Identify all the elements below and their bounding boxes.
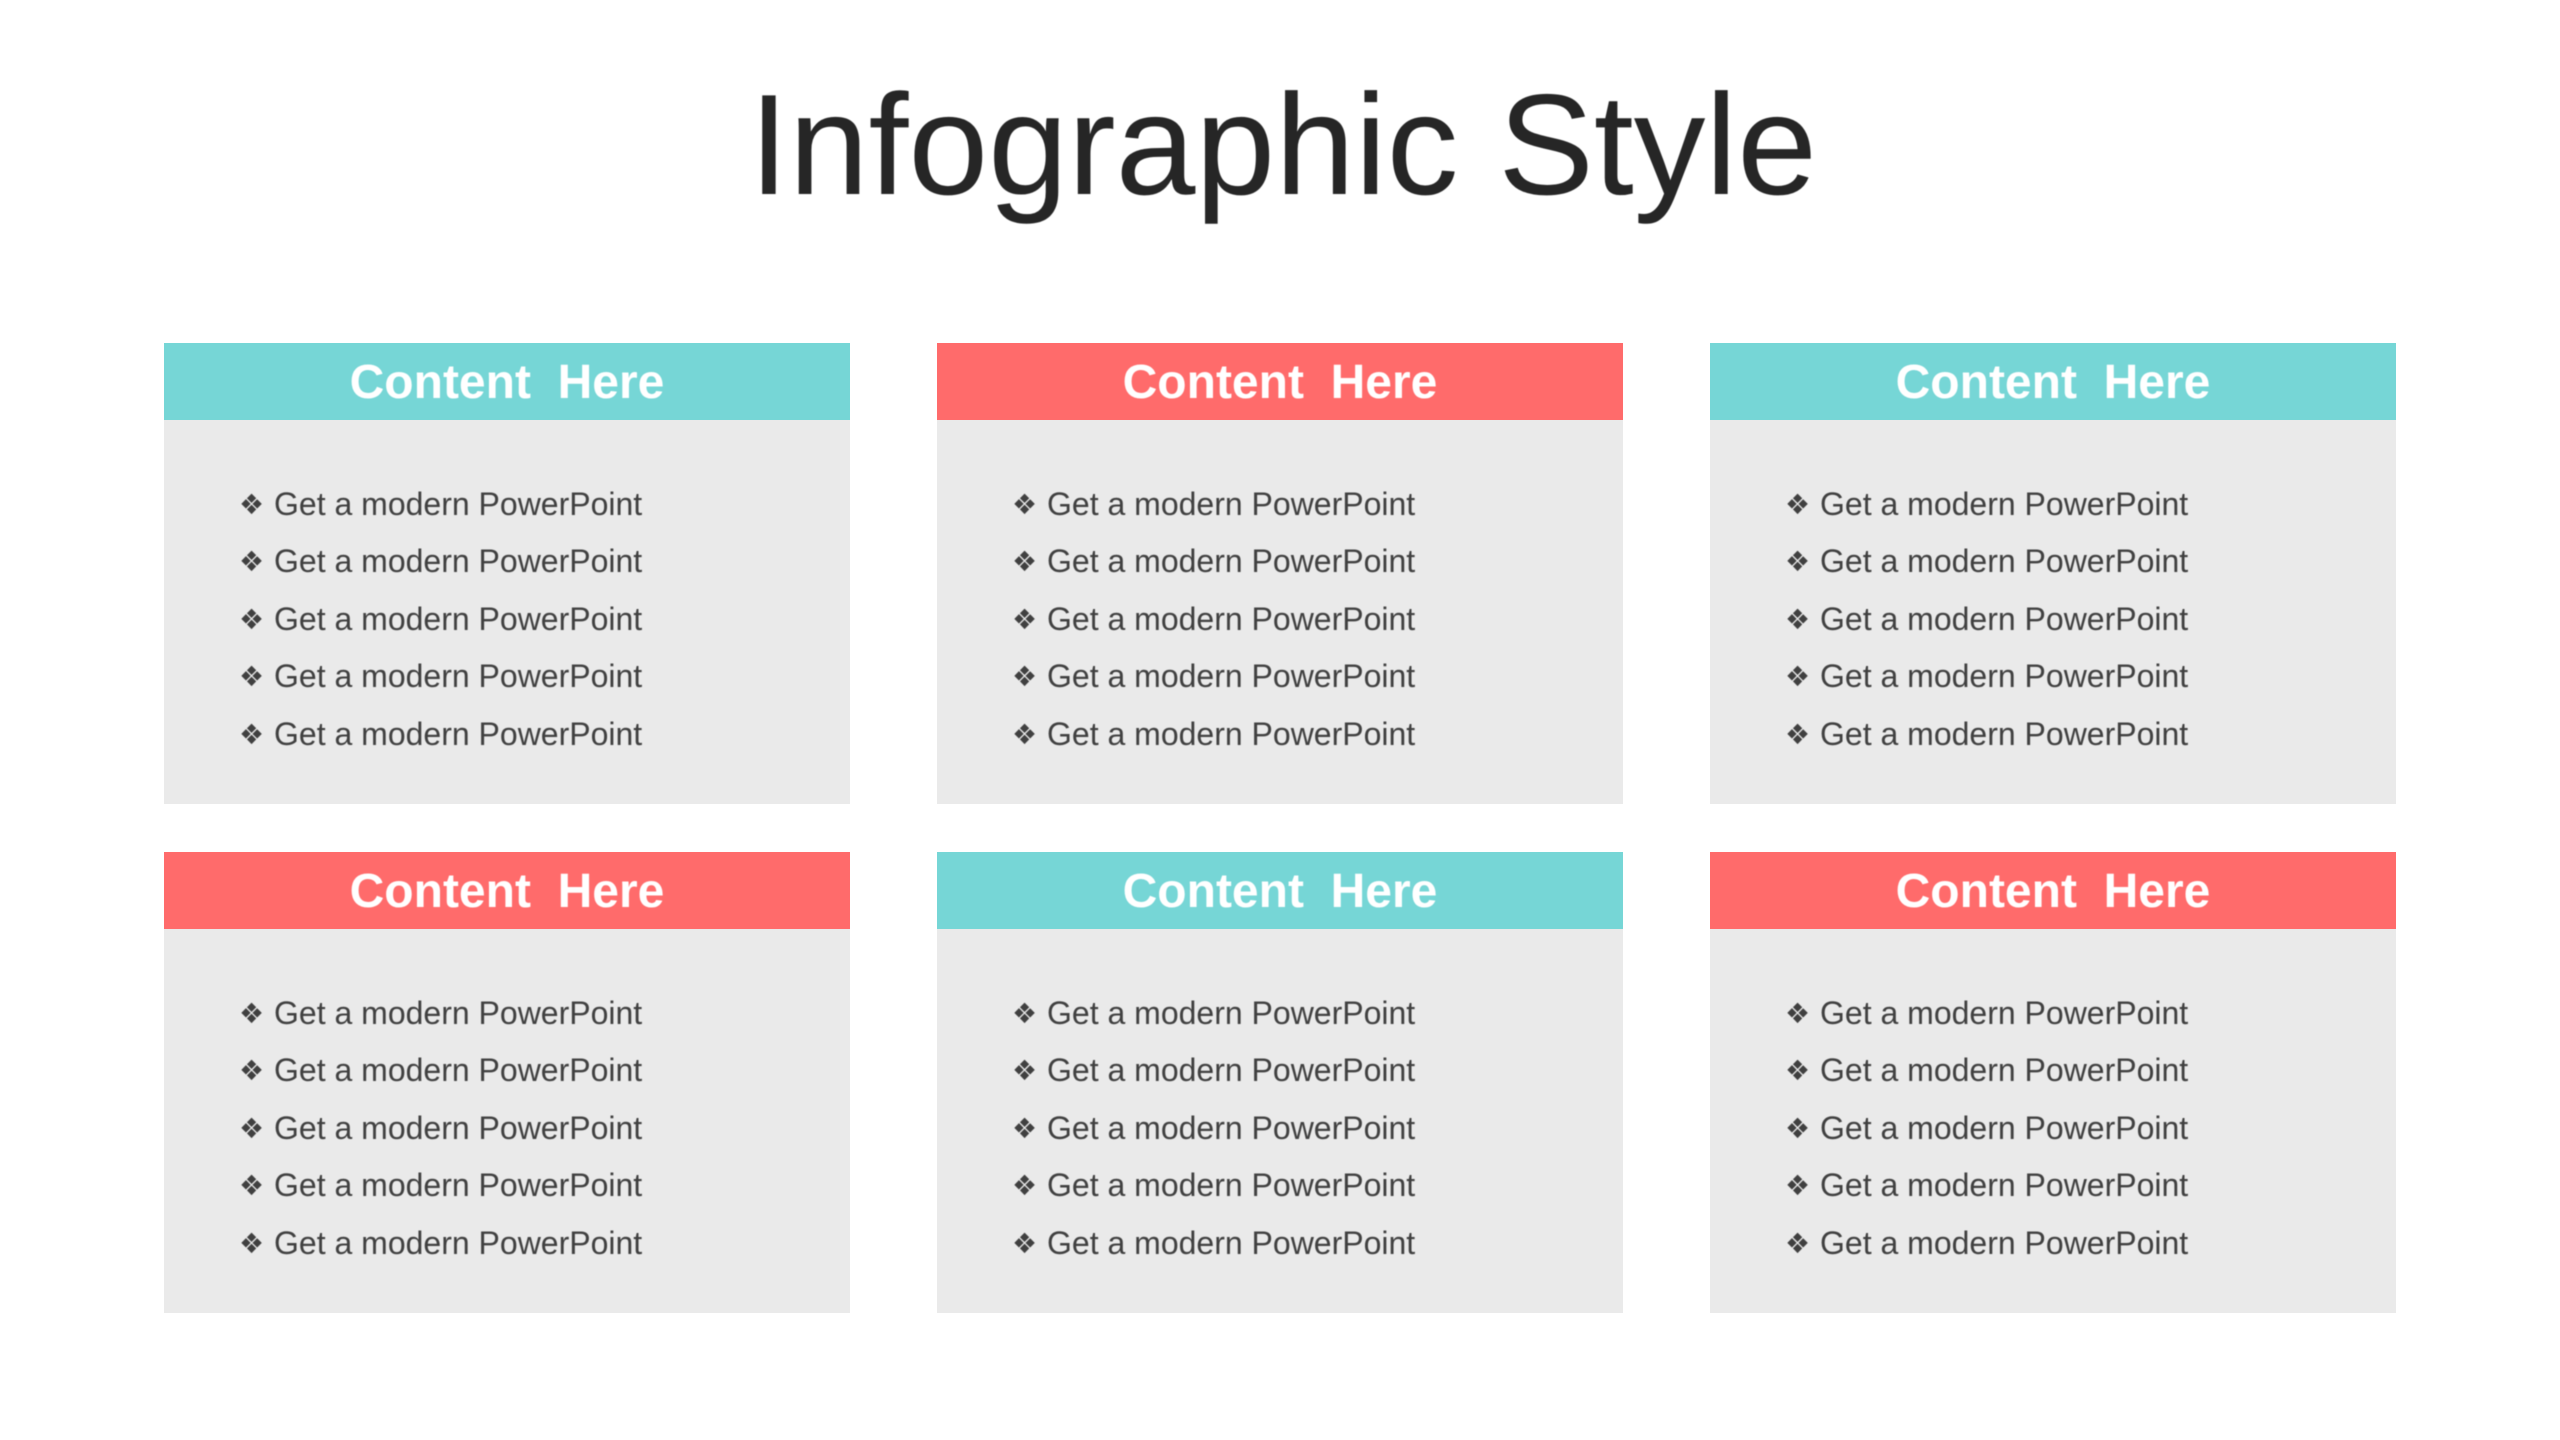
panel: bottom right (1710, 852, 2396, 1313)
list: bottom right: Get a modern PowerPoint (1820, 1225, 2188, 1261)
list: bottom right: ❖ (1785, 1169, 1810, 1202)
list: top middle: Get a modern PowerPoint (1047, 716, 1415, 752)
list: top left: Get a modern PowerPoint (274, 486, 642, 522)
panel: top middle (937, 343, 1623, 804)
list: top middle: Get a modern PowerPoint (1047, 601, 1415, 637)
list: top middle: ❖ (1012, 603, 1037, 636)
heading: bottom left (164, 852, 850, 929)
heading: top right: Content Here (1896, 356, 2210, 409)
list: bottom middle: Get a modern PowerPoint (1047, 1110, 1415, 1146)
list: bottom left: Get a modern PowerPoint (274, 1110, 642, 1146)
list: bottom left: ❖ (239, 1227, 264, 1260)
list: top left: ❖ (239, 718, 264, 751)
list: bottom right: ❖ (1785, 997, 1810, 1030)
list: top left: ❖ (239, 660, 264, 693)
list: bottom right: Get a modern PowerPoint (1820, 1052, 2188, 1088)
list: top left: ❖ (239, 545, 264, 578)
list: bottom right: Get a modern PowerPoint (1820, 1110, 2188, 1146)
list: bottom left: Get a modern PowerPoint (274, 1225, 642, 1261)
title: Infographic Style (749, 65, 1817, 225)
list: top left: Get a modern PowerPoint (274, 543, 642, 579)
list: top right: ❖ (1785, 488, 1810, 521)
list: bottom right: Get a modern PowerPoint (1820, 995, 2188, 1031)
heading: top left: Content Here (350, 356, 664, 409)
list: bottom middle: Get a modern PowerPoint (1047, 995, 1415, 1031)
list: bottom left: Get a modern PowerPoint (274, 1052, 642, 1088)
list: top middle: ❖ (1012, 545, 1037, 578)
list: top left: ❖ (239, 603, 264, 636)
list: bottom middle: ❖ (1012, 1112, 1037, 1145)
list: bottom left (239, 995, 643, 1261)
panel: top right (1710, 343, 2396, 804)
list: bottom left: Get a modern PowerPoint (274, 995, 642, 1031)
list: top left: Get a modern PowerPoint (274, 716, 642, 752)
heading: top right (1710, 343, 2396, 420)
list: bottom middle (1012, 995, 1416, 1261)
heading: top middle (937, 343, 1623, 420)
panel: top left (164, 343, 850, 804)
list: top middle: Get a modern PowerPoint (1047, 486, 1415, 522)
list: bottom middle: ❖ (1012, 997, 1037, 1030)
list: bottom left: Get a modern PowerPoint (274, 1167, 642, 1203)
heading: bottom right (1710, 852, 2396, 929)
list: bottom right: ❖ (1785, 1227, 1810, 1260)
list: bottom left: ❖ (239, 1112, 264, 1145)
list: bottom right (1785, 995, 2189, 1261)
list: top right: ❖ (1785, 545, 1810, 578)
list: bottom left: ❖ (239, 1169, 264, 1202)
list: top right: Get a modern PowerPoint (1820, 601, 2188, 637)
list: bottom middle: Get a modern PowerPoint (1047, 1167, 1415, 1203)
list: top right: Get a modern PowerPoint (1820, 716, 2188, 752)
list: bottom middle: Get a modern PowerPoint (1047, 1225, 1415, 1261)
panel: bottom middle (937, 852, 1623, 1313)
list: top right: ❖ (1785, 603, 1810, 636)
list: top right: Get a modern PowerPoint (1820, 658, 2188, 694)
list: top middle: ❖ (1012, 718, 1037, 751)
list: top right: Get a modern PowerPoint (1820, 486, 2188, 522)
list: top left: Get a modern PowerPoint (274, 601, 642, 637)
list: bottom middle: ❖ (1012, 1227, 1037, 1260)
list: top right (1785, 486, 2189, 752)
list: bottom left: ❖ (239, 1054, 264, 1087)
heading: bottom right: Content Here (1896, 865, 2210, 918)
panel: bottom left (164, 852, 850, 1313)
list: bottom middle: ❖ (1012, 1169, 1037, 1202)
list: top right: ❖ (1785, 718, 1810, 751)
list: top right: Get a modern PowerPoint (1820, 543, 2188, 579)
list: top middle: Get a modern PowerPoint (1047, 543, 1415, 579)
list: top left: Get a modern PowerPoint (274, 658, 642, 694)
list: bottom left: ❖ (239, 997, 264, 1030)
heading: top middle: Content Here (1123, 356, 1437, 409)
heading: bottom middle (937, 852, 1623, 929)
list: top left (239, 486, 643, 752)
heading: bottom left: Content Here (350, 865, 664, 918)
heading: top left (164, 343, 850, 420)
list: bottom right: Get a modern PowerPoint (1820, 1167, 2188, 1203)
list: top middle (1012, 486, 1416, 752)
list: top middle: Get a modern PowerPoint (1047, 658, 1415, 694)
list: top right: ❖ (1785, 660, 1810, 693)
list: top middle: ❖ (1012, 660, 1037, 693)
list: bottom right: ❖ (1785, 1054, 1810, 1087)
list: bottom middle: Get a modern PowerPoint (1047, 1052, 1415, 1088)
list: top left: ❖ (239, 488, 264, 521)
heading: bottom middle: Content Here (1123, 865, 1437, 918)
list: bottom right: ❖ (1785, 1112, 1810, 1145)
list: bottom middle: ❖ (1012, 1054, 1037, 1087)
list: top middle: ❖ (1012, 488, 1037, 521)
